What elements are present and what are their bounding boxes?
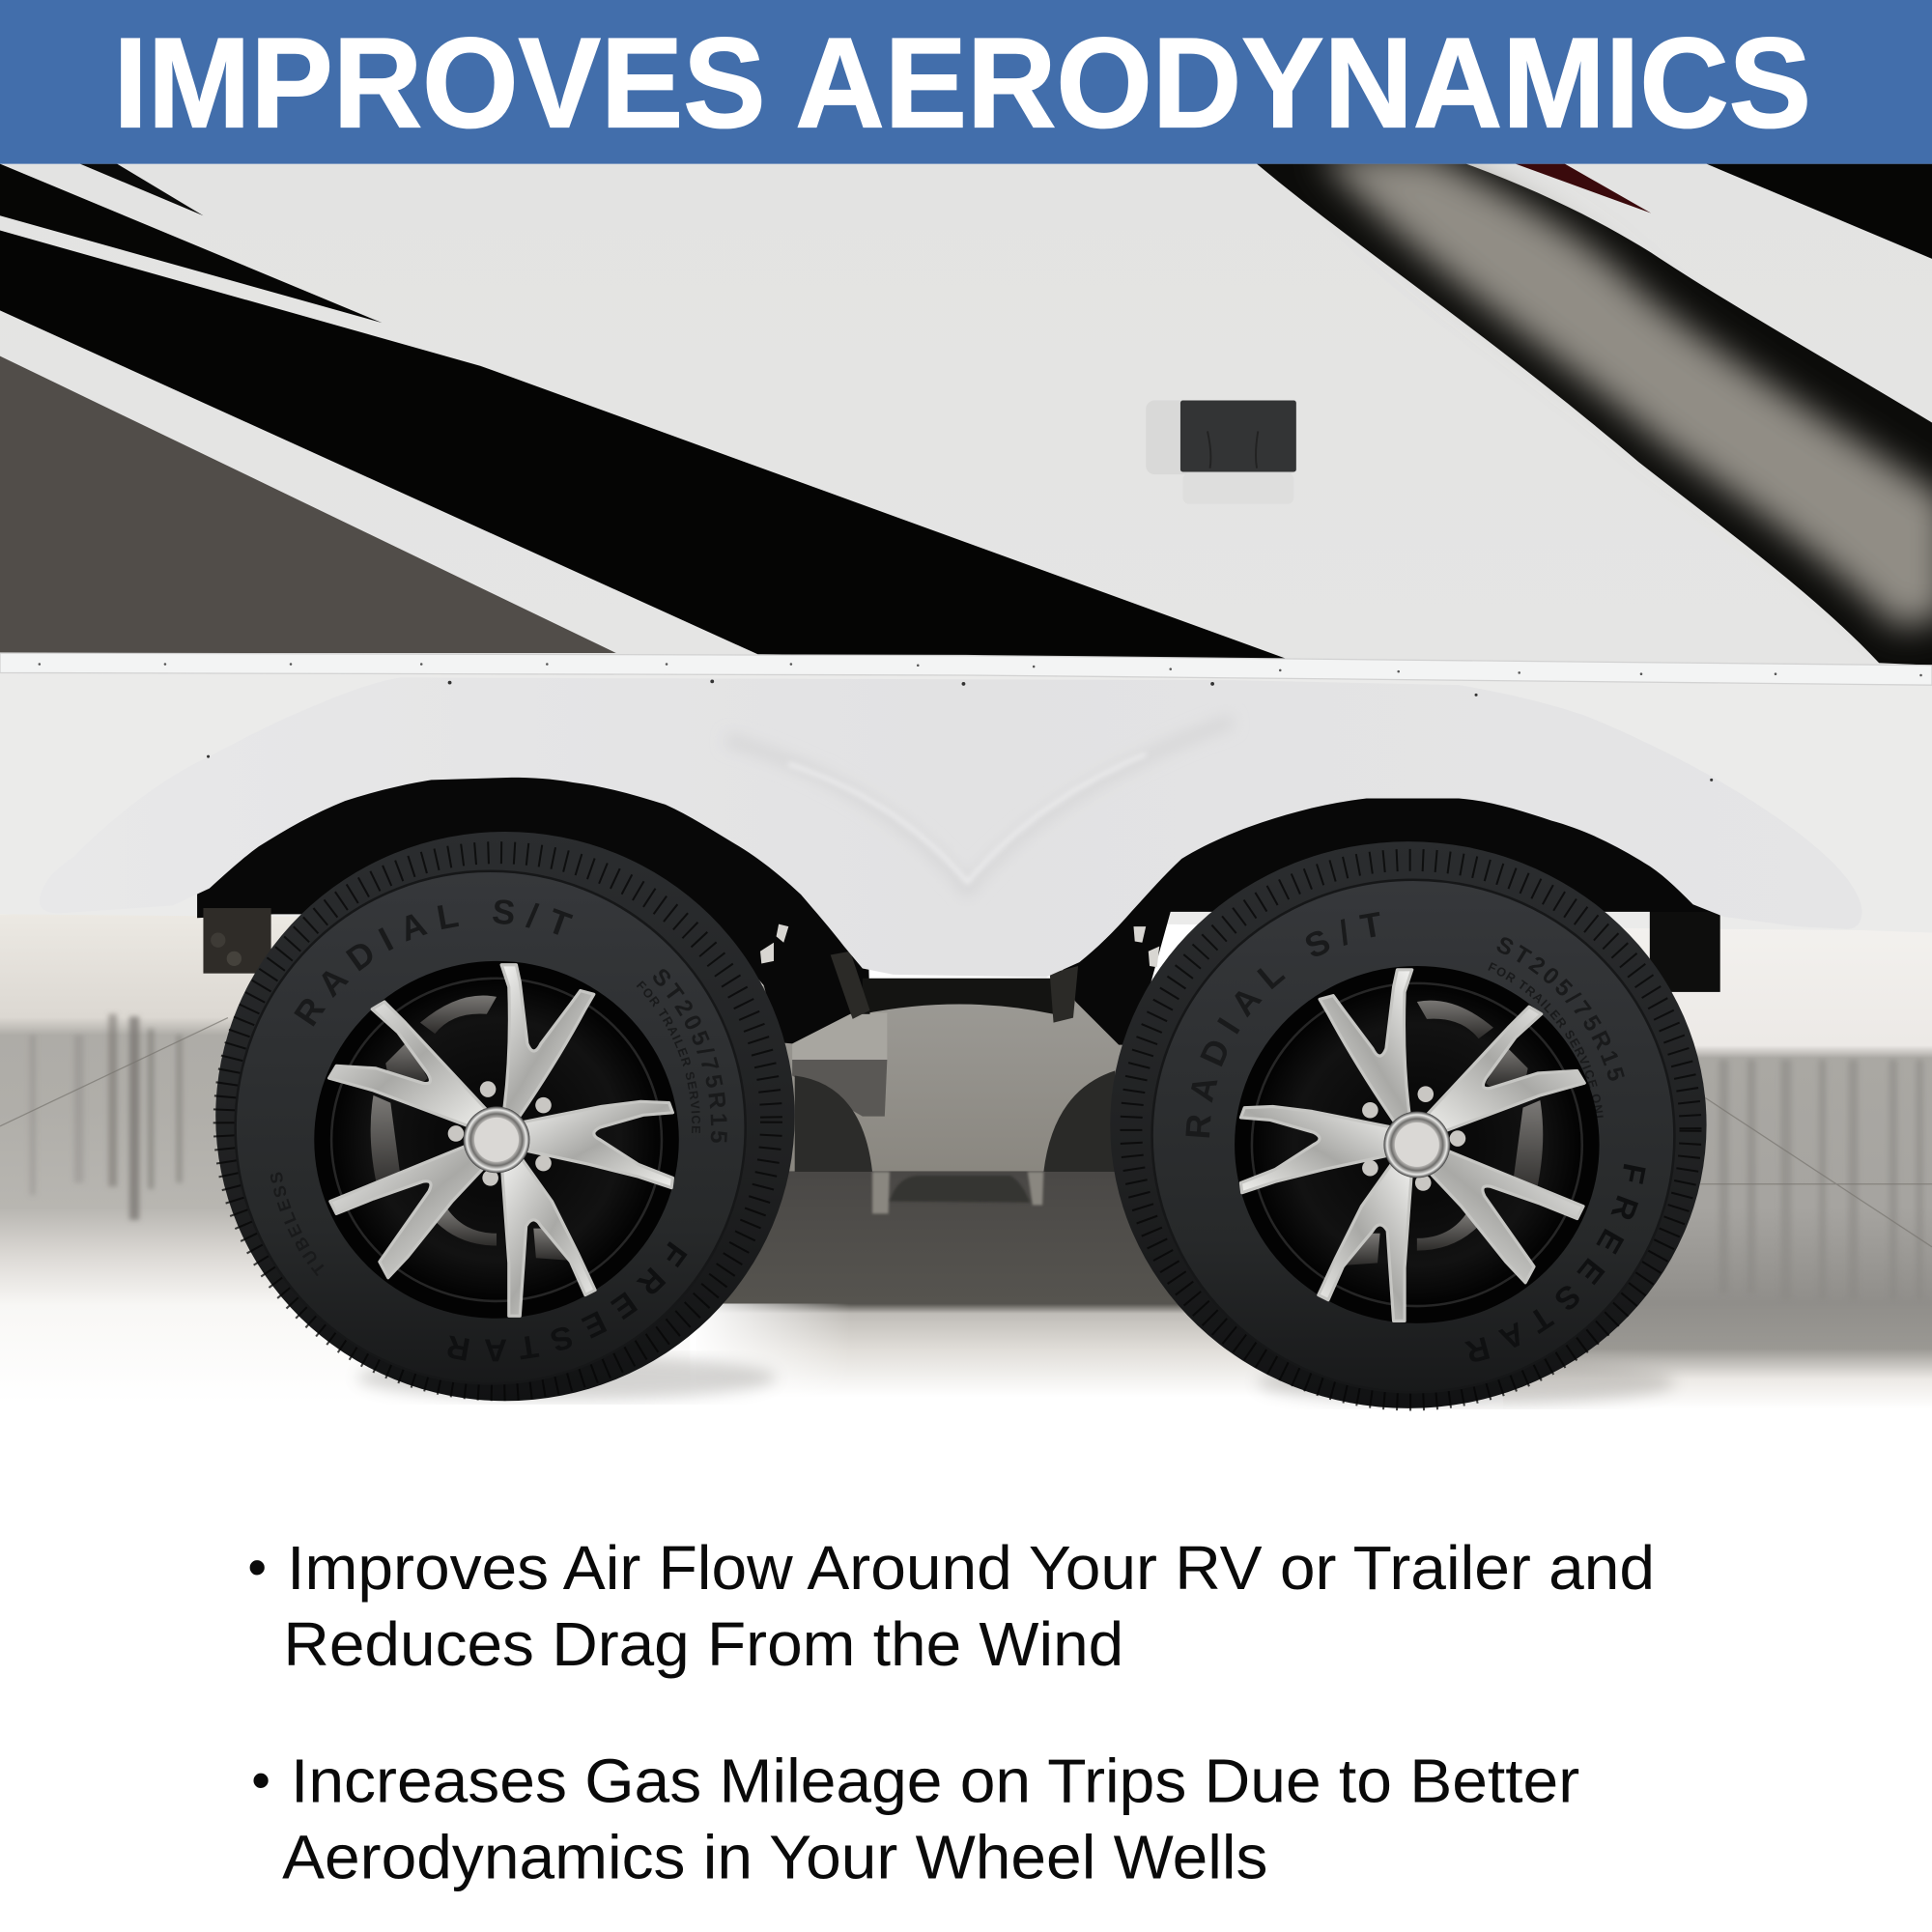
contact shadow: [1257, 1360, 1676, 1405]
left arch and spare wheel darkness: [197, 764, 870, 1043]
icon: black wall hatch box: [1146, 401, 1296, 504]
bullet two: Increases Gas Mileage on Trips Due to Better: [291, 1746, 1579, 1815]
panel: double fender skirt: [40, 678, 1861, 977]
panel: dark under-fender frame and suspension: [197, 764, 1720, 1045]
wheel: left tire and rim: [213, 832, 795, 1405]
bullet one: •: [247, 1537, 267, 1598]
sidewall lettering: FOR TRAILER SERVICE ONLY: [1488, 962, 1604, 1118]
reflection: darker block below: [792, 1060, 887, 1117]
sidewall lettering: RADIAL S/T: [1186, 912, 1379, 1138]
axle equalizer bar: [863, 979, 1054, 1014]
title: IMPROVES AERODYNAMICS: [113, 12, 1811, 155]
tire tread: [1110, 841, 1707, 1408]
right arch and spare wheel darkness: [1060, 788, 1720, 1045]
sidewall lettering: TUBELESS: [270, 1173, 324, 1276]
floor streaks left: [30, 1014, 183, 1220]
sidewall lettering: [1186, 912, 1646, 1362]
reflection: left dark arch: [795, 1076, 872, 1172]
sidewall lettering: FOR TRAILER SERVICE ONLY: [637, 980, 700, 1133]
floor streaks right: [1719, 1060, 1923, 1300]
sidewall lettering: ST205/75R15: [1497, 937, 1625, 1081]
trim strip: [0, 653, 1932, 685]
suspension link left: [831, 952, 870, 1019]
contact shadow: [357, 1355, 777, 1400]
bullet one: [247, 1533, 1655, 1679]
sidewall lettering: [270, 900, 727, 1362]
tire tread: [215, 832, 795, 1401]
sidewall lettering: RADIAL S/T: [294, 900, 574, 1026]
spring hanger right: [1650, 912, 1720, 992]
sidewall lettering: ST205/75R15: [653, 969, 727, 1143]
sidewall: [236, 871, 746, 1383]
panel: floor with reflections: [0, 914, 1932, 1430]
spare wheel slots: [760, 924, 1159, 967]
bullet two: [251, 1746, 1579, 1892]
fade of centre floor into bright left floor: [690, 1303, 850, 1430]
bullet two: Aerodynamics in Your Wheel Wells: [282, 1823, 1267, 1892]
panel: trailer side wall: [0, 154, 1932, 669]
rim: [314, 961, 679, 1319]
floor tile lines: [0, 1018, 1932, 1247]
sidewall: [1152, 880, 1674, 1392]
panel: lower skirt wall: [0, 653, 1932, 933]
graphic: dark grey panel: [0, 356, 616, 653]
bullet text block: [247, 1533, 1655, 1892]
bullet one: Improves Air Flow Around Your RV or Trailer and: [287, 1533, 1655, 1603]
graphic: main black stripe: [0, 231, 1288, 659]
reflection: right dark arch: [1043, 1070, 1115, 1172]
graphic: slim black stripe: [0, 164, 382, 323]
graphic: small top-left sliver: [80, 164, 203, 215]
title banner: [0, 0, 1932, 164]
sidewall lettering: FREESTAR: [1464, 1164, 1646, 1362]
reflection: dark band: [890, 1176, 1030, 1203]
spring hanger left: [203, 908, 271, 974]
wheel: right tire and rim: [1111, 841, 1707, 1410]
graphic: right curved swoosh: [1257, 154, 1932, 666]
reflection: pale block between wheels: [792, 1012, 887, 1060]
suspension link right: [1050, 966, 1078, 1023]
graphic: top-right black corner: [1707, 164, 1932, 259]
reflection: pale columns: [872, 1172, 1043, 1213]
bullet two: •: [251, 1749, 270, 1810]
fender screws: [207, 679, 1713, 781]
graphic: red accent sliver: [1516, 164, 1651, 213]
rim: [1235, 966, 1600, 1323]
trim screws: [39, 663, 1922, 676]
bullet one: Reduces Drag From the Wind: [283, 1609, 1123, 1679]
sidewall lettering: FREESTAR: [448, 1241, 688, 1362]
